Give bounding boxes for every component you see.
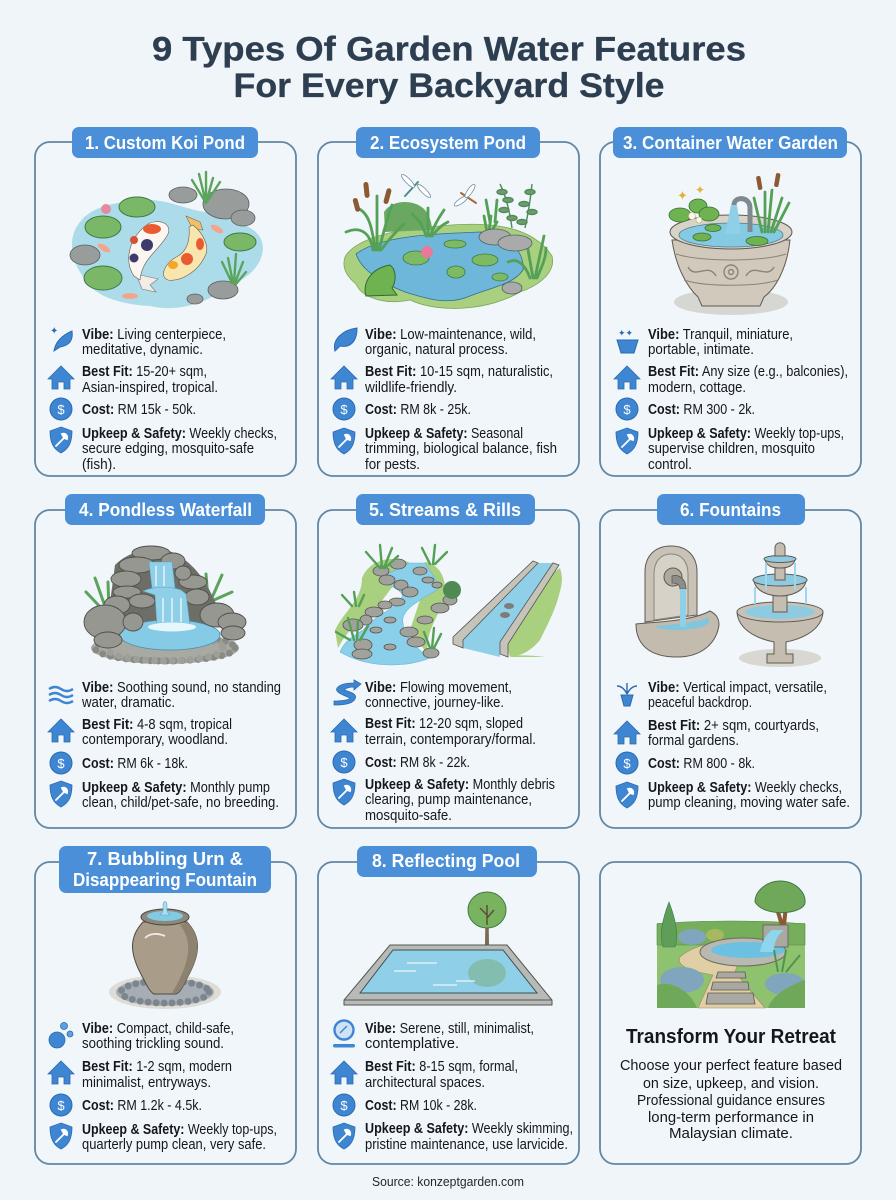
upkeep row [50, 1122, 277, 1153]
cost row [333, 398, 471, 420]
cost row [616, 752, 755, 774]
best fit row [614, 364, 848, 396]
best fit row [331, 1059, 518, 1091]
upkeep row: Upkeep & Safety: Weekly checks, [82, 426, 277, 442]
best fit row: architectural spaces. [365, 1075, 485, 1091]
vibe row: contemplative. [365, 1036, 459, 1052]
upkeep row [50, 780, 279, 811]
cost row [616, 398, 755, 420]
panel: 1 custom koi pond [35, 127, 296, 476]
vibe row: connective, journey-like. [365, 695, 504, 711]
panel frame [318, 142, 579, 476]
heading [356, 494, 535, 525]
upkeep row [50, 426, 277, 473]
panel: 6 fountains [600, 494, 861, 828]
title: 9 Types Of Garden Water Features [152, 30, 746, 68]
vibe row [50, 326, 226, 358]
best fit row: Best Fit: 10-15 sqm, naturalistic, [365, 364, 553, 380]
cost row: Cost: RM 6k - 18k. [82, 756, 188, 772]
upkeep row: pristine maintenance, use larvicide. [365, 1137, 568, 1153]
panel frame [35, 142, 296, 476]
upkeep row: Upkeep & Safety: Weekly top-ups, [82, 1122, 277, 1138]
best fit row: Best Fit: 12-20 sqm, sloped [365, 716, 523, 732]
closing text: Choose your perfect feature based [620, 1057, 842, 1074]
upkeep row: Upkeep & Safety: Monthly debris [365, 777, 555, 793]
closing text: Professional guidance ensures [637, 1092, 825, 1109]
best fit row [331, 364, 553, 396]
cost row: $ [623, 756, 631, 771]
heading: 2. Ecosystem Pond [370, 133, 526, 153]
upkeep row: Upkeep & Safety: Weekly skimming, [365, 1121, 573, 1137]
closing text: long-term performance in [648, 1109, 814, 1126]
cost row [50, 398, 196, 420]
illustration: waterfall [84, 546, 246, 664]
specs [331, 1020, 573, 1153]
cost row: Cost: RM 300 - 2k. [648, 402, 755, 418]
heading: 4. Pondless Waterfall [79, 500, 252, 520]
cost row: Cost: RM 15k - 50k. [82, 402, 196, 418]
upkeep row [616, 780, 850, 811]
cost row: Cost: RM 8k - 22k. [365, 755, 470, 771]
heading: 7. Bubbling Urn & [87, 849, 243, 869]
best fit row: wildlife-friendly. [364, 380, 457, 396]
upkeep row: control. [648, 457, 692, 473]
upkeep row: Upkeep & Safety: Weekly checks, [648, 780, 842, 796]
vibe row [334, 327, 536, 358]
panel frame [35, 510, 296, 828]
panel: 4 pondless waterfall [35, 494, 296, 828]
cost row [50, 752, 188, 774]
vibe row [334, 680, 512, 711]
panel frame [35, 862, 296, 1164]
heading [65, 494, 265, 525]
cost row: $ [340, 1098, 348, 1113]
illustration: container garden [669, 173, 792, 315]
best fit row: formal gardens. [648, 733, 739, 749]
vibe row: organic, natural process. [365, 342, 508, 358]
vibe row [49, 680, 281, 711]
upkeep row: Upkeep & Safety: Weekly top-ups, [648, 426, 844, 442]
vibe row: Vibe: Soothing sound, no standing [82, 680, 281, 696]
upkeep row: supervise children, mosquito [648, 441, 815, 457]
vibe row: Vibe: Low-maintenance, wild, [365, 327, 536, 343]
source line: Source: konzeptgarden.com [372, 1174, 524, 1189]
illustration: bubbling urn [109, 902, 221, 1009]
upkeep row: quarterly pump clean, very safe. [82, 1137, 266, 1153]
upkeep row: clean, child/pet-safe, no breeding. [82, 795, 279, 811]
cost row: Cost: RM 8k - 25k. [365, 402, 471, 418]
vibe row: peaceful backdrop. [648, 695, 752, 711]
heading [357, 846, 537, 877]
best fit row: Best Fit: 4-8 sqm, tropical [82, 717, 232, 733]
panel: 5 streams and rills [318, 494, 579, 828]
vibe row [333, 1020, 534, 1052]
cost row: Cost: RM 1.2k - 4.5k. [82, 1098, 202, 1114]
panel frame [600, 142, 861, 476]
heading: 6. Fountains [680, 500, 781, 520]
vibe row: Vibe: Living centerpiece, [82, 327, 226, 343]
vibe row: Vibe: Tranquil, miniature, [648, 327, 793, 343]
heading [356, 127, 540, 158]
panel: 7 bubbling urn [35, 846, 296, 1164]
panel: 9 transform your retreat [600, 862, 861, 1164]
best fit row: Best Fit: 8-15 sqm, formal, [365, 1059, 518, 1075]
panel: 2 ecosystem pond [318, 127, 579, 476]
illustration: container garden: ✦ [695, 183, 705, 197]
specs [614, 327, 848, 473]
upkeep row [333, 777, 555, 824]
upkeep row: secure edging, mosquito-safe [82, 441, 254, 457]
illustration: ecosystem pond [344, 173, 553, 308]
best fit row: modern, cottage. [648, 380, 746, 396]
best fit row: Best Fit: 15-20+ sqm, [82, 364, 207, 380]
heading [613, 127, 847, 158]
best fit row: Best Fit: 1-2 sqm, modern [82, 1059, 232, 1075]
heading [72, 127, 258, 158]
vibe row [617, 680, 827, 711]
specs [48, 680, 281, 811]
panel: 8 reflecting pool [318, 846, 579, 1164]
illustration: stream and rill [335, 545, 562, 665]
cost row [50, 1094, 202, 1116]
vibe row: Vibe: Vertical impact, versatile, [648, 680, 827, 696]
best fit row: terrain, contemporary/formal. [365, 732, 536, 748]
closing heading: Transform Your Retreat [626, 1026, 836, 1048]
illustration: container garden: ✦ [677, 188, 688, 203]
upkeep row: trimming, biological balance, fish [365, 441, 557, 457]
specs [331, 680, 555, 824]
vibe row: meditative, dynamic. [82, 342, 203, 358]
upkeep row: clearing, pump maintenance, [365, 792, 532, 808]
vibe row: water, dramatic. [81, 695, 175, 711]
closing text: on size, upkeep, and vision. [643, 1075, 819, 1092]
heading: Disappearing Fountain [73, 870, 257, 890]
cost row [333, 1094, 477, 1116]
best fit row [48, 1059, 232, 1091]
heading: 1. Custom Koi Pond [85, 133, 245, 153]
heading: 8. Reflecting Pool [372, 851, 520, 871]
heading [657, 494, 805, 525]
specs [48, 326, 277, 473]
panel frame [318, 510, 579, 828]
closing text: Malaysian climate. [669, 1125, 793, 1142]
cost row: $ [57, 402, 65, 417]
panel frame [600, 510, 861, 828]
title: For Every Backyard Style [234, 67, 664, 105]
illustration: fountains [636, 543, 823, 667]
best fit row: minimalist, entryways. [82, 1075, 211, 1091]
heading: 3. Container Water Garden [623, 133, 838, 153]
best fit row [614, 718, 819, 749]
upkeep row [333, 426, 557, 473]
upkeep row: for pests. [365, 457, 420, 473]
upkeep row: Upkeep & Safety: Monthly pump [82, 780, 270, 796]
cost row: $ [340, 402, 348, 417]
title [152, 30, 746, 105]
upkeep row: (fish). [82, 457, 116, 473]
vibe row: Vibe: Serene, still, minimalist, [365, 1021, 534, 1037]
cost row: $ [57, 756, 65, 771]
vibe row [49, 1021, 234, 1052]
cost row: Cost: RM 800 - 8k. [648, 756, 755, 772]
best fit row [48, 364, 218, 396]
upkeep row: mosquito-safe. [365, 808, 452, 824]
vibe row: Vibe: Flowing movement, [365, 680, 512, 696]
upkeep row [616, 426, 844, 473]
cost row [333, 751, 470, 773]
upkeep row: pump cleaning, moving water safe. [648, 795, 850, 811]
specs [48, 1021, 277, 1153]
heading: 5. Streams & Rills [369, 500, 521, 520]
upkeep row [333, 1121, 573, 1153]
panel frame [318, 862, 579, 1164]
vibe row: ✦✦ [618, 328, 634, 338]
cost row: $ [57, 1098, 65, 1113]
best fit row: Best Fit: 2+ sqm, courtyards, [648, 718, 819, 734]
heading [59, 846, 271, 893]
specs [614, 680, 850, 811]
cost row: Cost: RM 10k - 28k. [365, 1098, 477, 1114]
vibe row: ✦ [50, 326, 58, 337]
best fit row: Best Fit: Any size (e.g., balconies), [648, 364, 848, 380]
panel frame [600, 862, 861, 1164]
illustration: garden scene [657, 881, 805, 1008]
illustration: reflecting pool [344, 892, 552, 1005]
specs [331, 327, 557, 473]
panel: 3 container water garden [600, 127, 861, 476]
vibe row: soothing trickling sound. [82, 1036, 224, 1052]
vibe row [617, 327, 793, 358]
closing text [620, 1057, 842, 1142]
illustration: koi pond [70, 172, 263, 308]
cost row: $ [623, 402, 631, 417]
upkeep row: Upkeep & Safety: Seasonal [365, 426, 523, 442]
cost row: $ [340, 755, 348, 770]
best fit row [48, 717, 232, 748]
best fit row [331, 716, 536, 748]
best fit row: contemporary, woodland. [82, 732, 228, 748]
vibe row: Vibe: Compact, child-safe, [82, 1021, 234, 1037]
vibe row: portable, intimate. [648, 342, 754, 358]
best fit row: Asian-inspired, tropical. [82, 380, 218, 396]
